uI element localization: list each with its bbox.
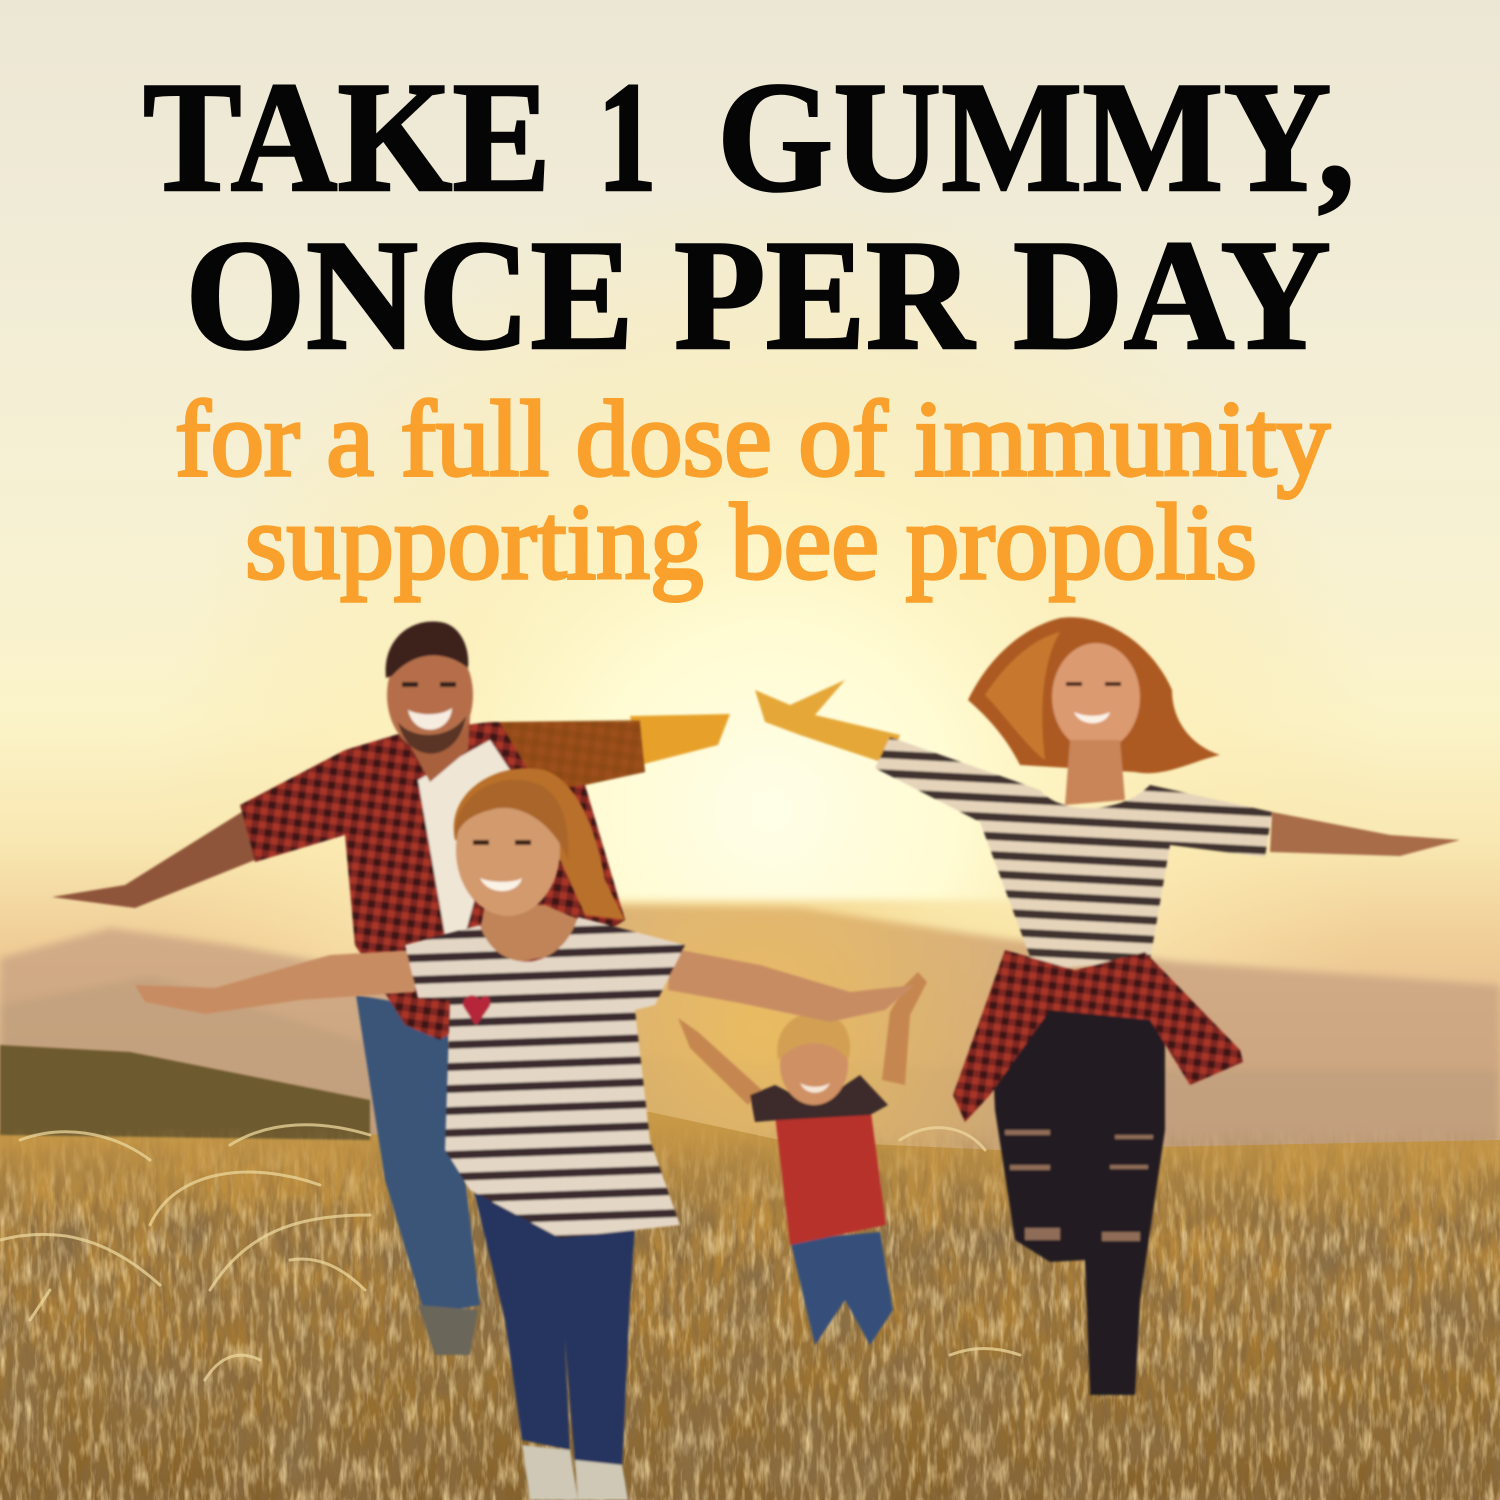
father: smile bbox=[408, 708, 452, 730]
boy: hair bbox=[777, 1012, 850, 1060]
girl: hair bbox=[454, 768, 625, 920]
mother: left arm bbox=[755, 680, 900, 765]
mother: hair bbox=[968, 617, 1220, 773]
title: 1 bbox=[597, 50, 657, 225]
title: PER bbox=[674, 208, 976, 383]
title: ONCE bbox=[185, 208, 634, 383]
father: left arm bbox=[52, 810, 255, 908]
mother: tied plaid shirt bbox=[953, 950, 1243, 1122]
girl: arms bbox=[135, 948, 915, 1022]
father: shoe bbox=[418, 1305, 478, 1355]
title: TAKE bbox=[143, 50, 551, 225]
father: hair bbox=[386, 622, 468, 678]
girl: head bbox=[456, 784, 560, 916]
girl: shoes bbox=[522, 1445, 628, 1500]
girl: eyes bbox=[473, 840, 531, 845]
girl: leggings bbox=[470, 1175, 635, 1470]
mother: face bbox=[1052, 643, 1140, 751]
background: sun glow bbox=[0, 0, 1500, 1100]
boy: smile bbox=[800, 1083, 830, 1093]
father: shirt bbox=[240, 722, 645, 1040]
mother: neck bbox=[1065, 740, 1125, 805]
mother: smile bbox=[1074, 712, 1110, 723]
girl: smile bbox=[480, 878, 522, 891]
subtitle: supporting bee propolis bbox=[245, 483, 1257, 602]
father: jeans bbox=[356, 995, 480, 1315]
mother: dark jeans bbox=[990, 990, 1165, 1395]
father: eyes bbox=[402, 682, 456, 687]
background: meadow bbox=[0, 1045, 1500, 1500]
title: DAY bbox=[1013, 208, 1331, 383]
figure: father bbox=[52, 622, 730, 1355]
father: right arm bbox=[630, 714, 730, 765]
boy: head bbox=[780, 1025, 848, 1105]
father: sunlit sleeve bbox=[500, 720, 645, 790]
girl: neck bbox=[480, 905, 580, 965]
title: GUMMY, bbox=[717, 50, 1355, 225]
father: beard bbox=[398, 716, 466, 754]
figure: mother bbox=[755, 617, 1460, 1395]
girl: striped dress bbox=[405, 917, 685, 1238]
girl: fringe bbox=[455, 780, 568, 860]
meadow: pale grass plumes bbox=[0, 1125, 1020, 1380]
subtitle bbox=[175, 380, 1330, 602]
boy: jeans bbox=[790, 1232, 893, 1345]
boy: arms bbox=[678, 972, 927, 1105]
subtitle: for a full dose of immunity bbox=[175, 380, 1330, 499]
figure: boy bbox=[678, 972, 927, 1345]
father: neck bbox=[408, 715, 470, 782]
mother: eyes bbox=[1066, 682, 1121, 686]
father: head bbox=[387, 638, 473, 752]
title bbox=[143, 50, 1355, 383]
boy: red shirt bbox=[775, 1105, 886, 1245]
figure: girl bbox=[135, 768, 915, 1500]
mother: jeans rips bbox=[1005, 1130, 1153, 1241]
background: distant hills bbox=[0, 900, 1500, 1160]
boy: dark yoke bbox=[750, 1075, 888, 1122]
father: white tee bbox=[418, 740, 510, 935]
mother: right arm bbox=[1270, 812, 1460, 856]
mother: sunlit hair bbox=[985, 632, 1060, 760]
girl: heart patch bbox=[463, 995, 490, 1026]
mother: striped top bbox=[875, 737, 1272, 970]
